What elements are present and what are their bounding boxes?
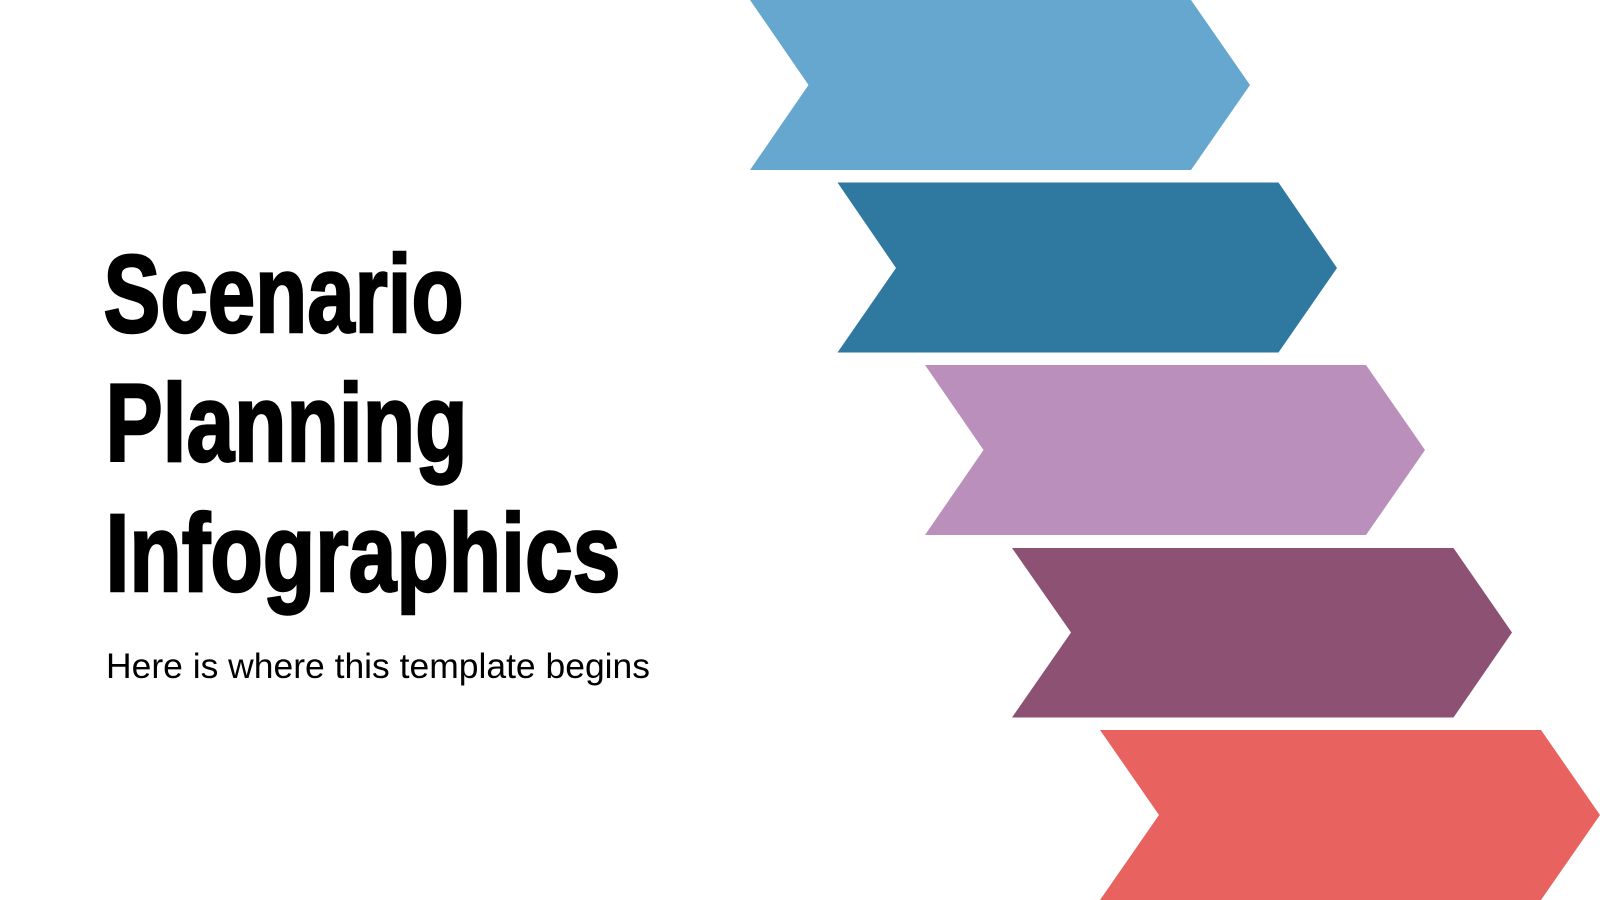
arrow 5: coral red [1100, 730, 1600, 900]
arrow 4: plum [1012, 548, 1512, 718]
title [104, 233, 620, 615]
subtitle: Here is where this template begins [106, 647, 650, 686]
arrow 1: light blue [750, 0, 1250, 170]
arrow 3: light purple [925, 365, 1425, 535]
title: Infographics [106, 492, 620, 615]
arrow 2: teal blue [838, 182, 1337, 352]
chevron arrows [750, 0, 1600, 900]
title: Scenario [104, 233, 464, 356]
title: Planning [106, 362, 468, 485]
